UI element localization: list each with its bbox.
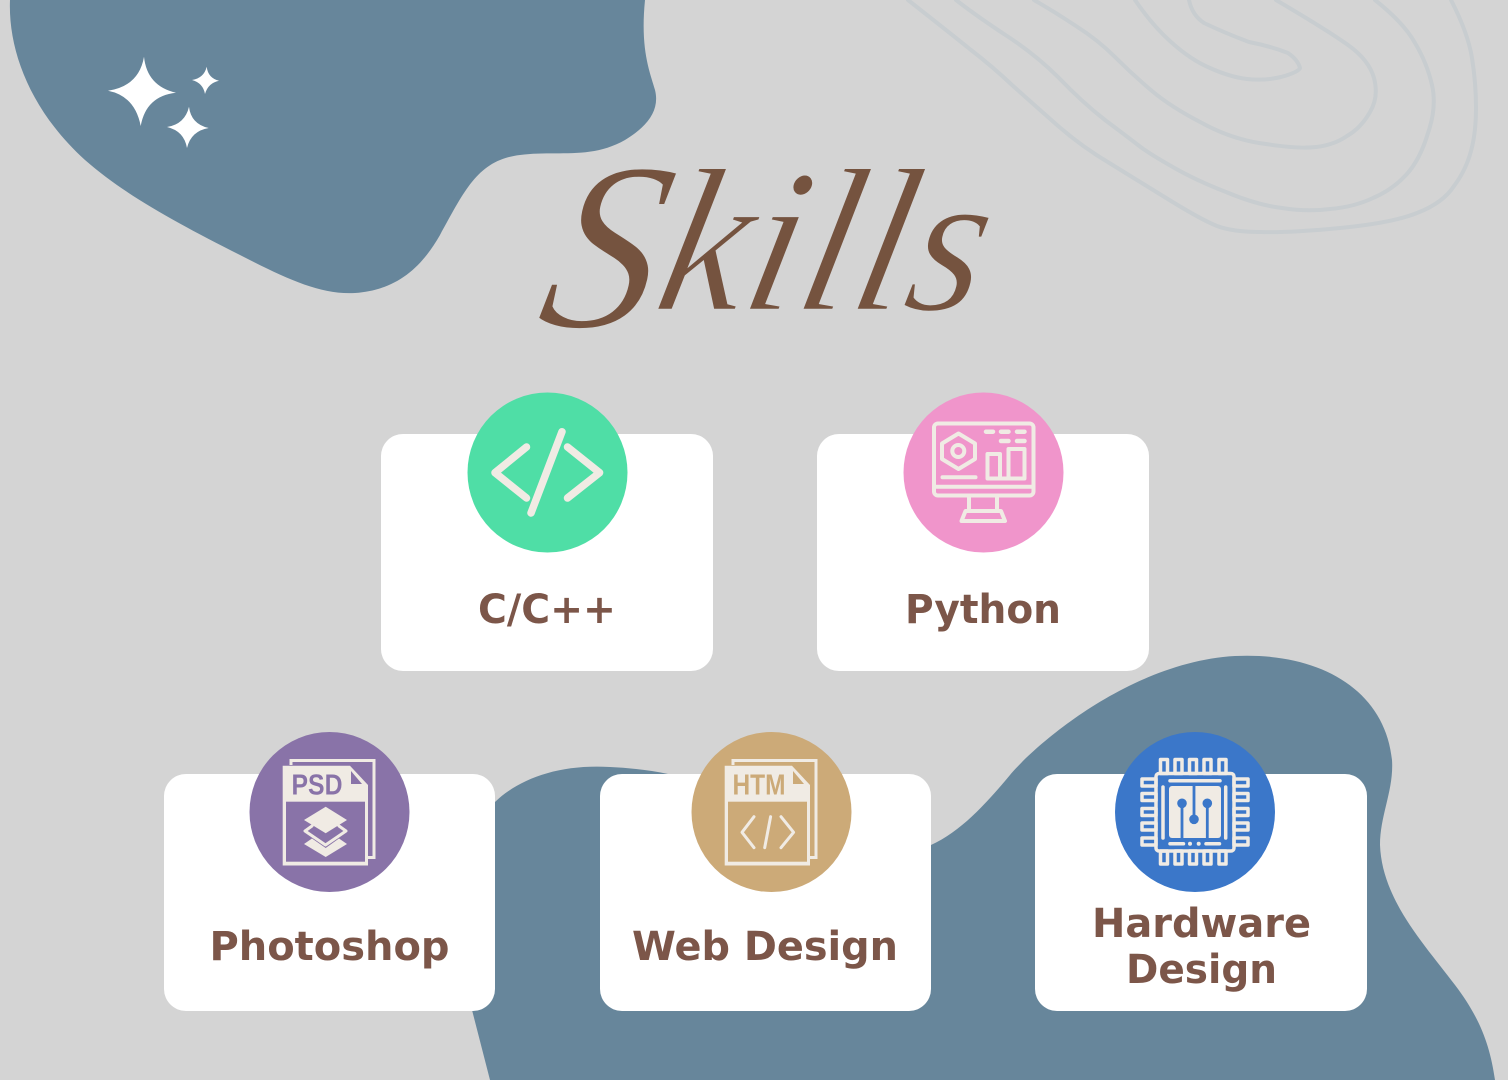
label: Photoshop — [210, 924, 450, 970]
icon: monitor dashboard — [934, 424, 1034, 521]
icon circle — [904, 392, 1064, 552]
contour lines: top right — [908, 0, 1476, 232]
card: Web Design — [600, 732, 931, 1011]
card: Photoshop — [164, 732, 495, 1011]
icon: PSD file — [283, 760, 374, 866]
icon circle — [250, 732, 410, 892]
blob: bottom right — [470, 656, 1495, 1080]
label: Python — [905, 587, 1061, 633]
title: S — [522, 114, 694, 380]
icon circle — [1115, 732, 1275, 892]
label: Web Design — [632, 924, 898, 970]
icon: sparkles — [108, 57, 219, 148]
icon: HTM file — [725, 760, 816, 866]
card background — [817, 434, 1149, 671]
icon circle — [468, 392, 628, 552]
blob: top left — [10, 0, 656, 293]
title: kills — [641, 128, 1016, 355]
icon circle — [692, 732, 852, 892]
card background — [600, 774, 931, 1011]
card background — [1035, 774, 1367, 1011]
label line 2: Design — [1126, 947, 1277, 993]
card: Python — [817, 392, 1149, 671]
icon: HTM file: HTM — [732, 769, 786, 801]
icon: code brackets — [495, 432, 600, 513]
card: C/C++ — [381, 392, 713, 671]
label: C/C++ — [478, 587, 616, 633]
label: Hardware — [1092, 901, 1311, 947]
icon: microchip — [1142, 760, 1248, 864]
card background — [381, 434, 713, 671]
card background — [164, 774, 495, 1011]
card: Hardware Design — [1035, 732, 1367, 1011]
icon: PSD file: PSD — [292, 769, 342, 801]
